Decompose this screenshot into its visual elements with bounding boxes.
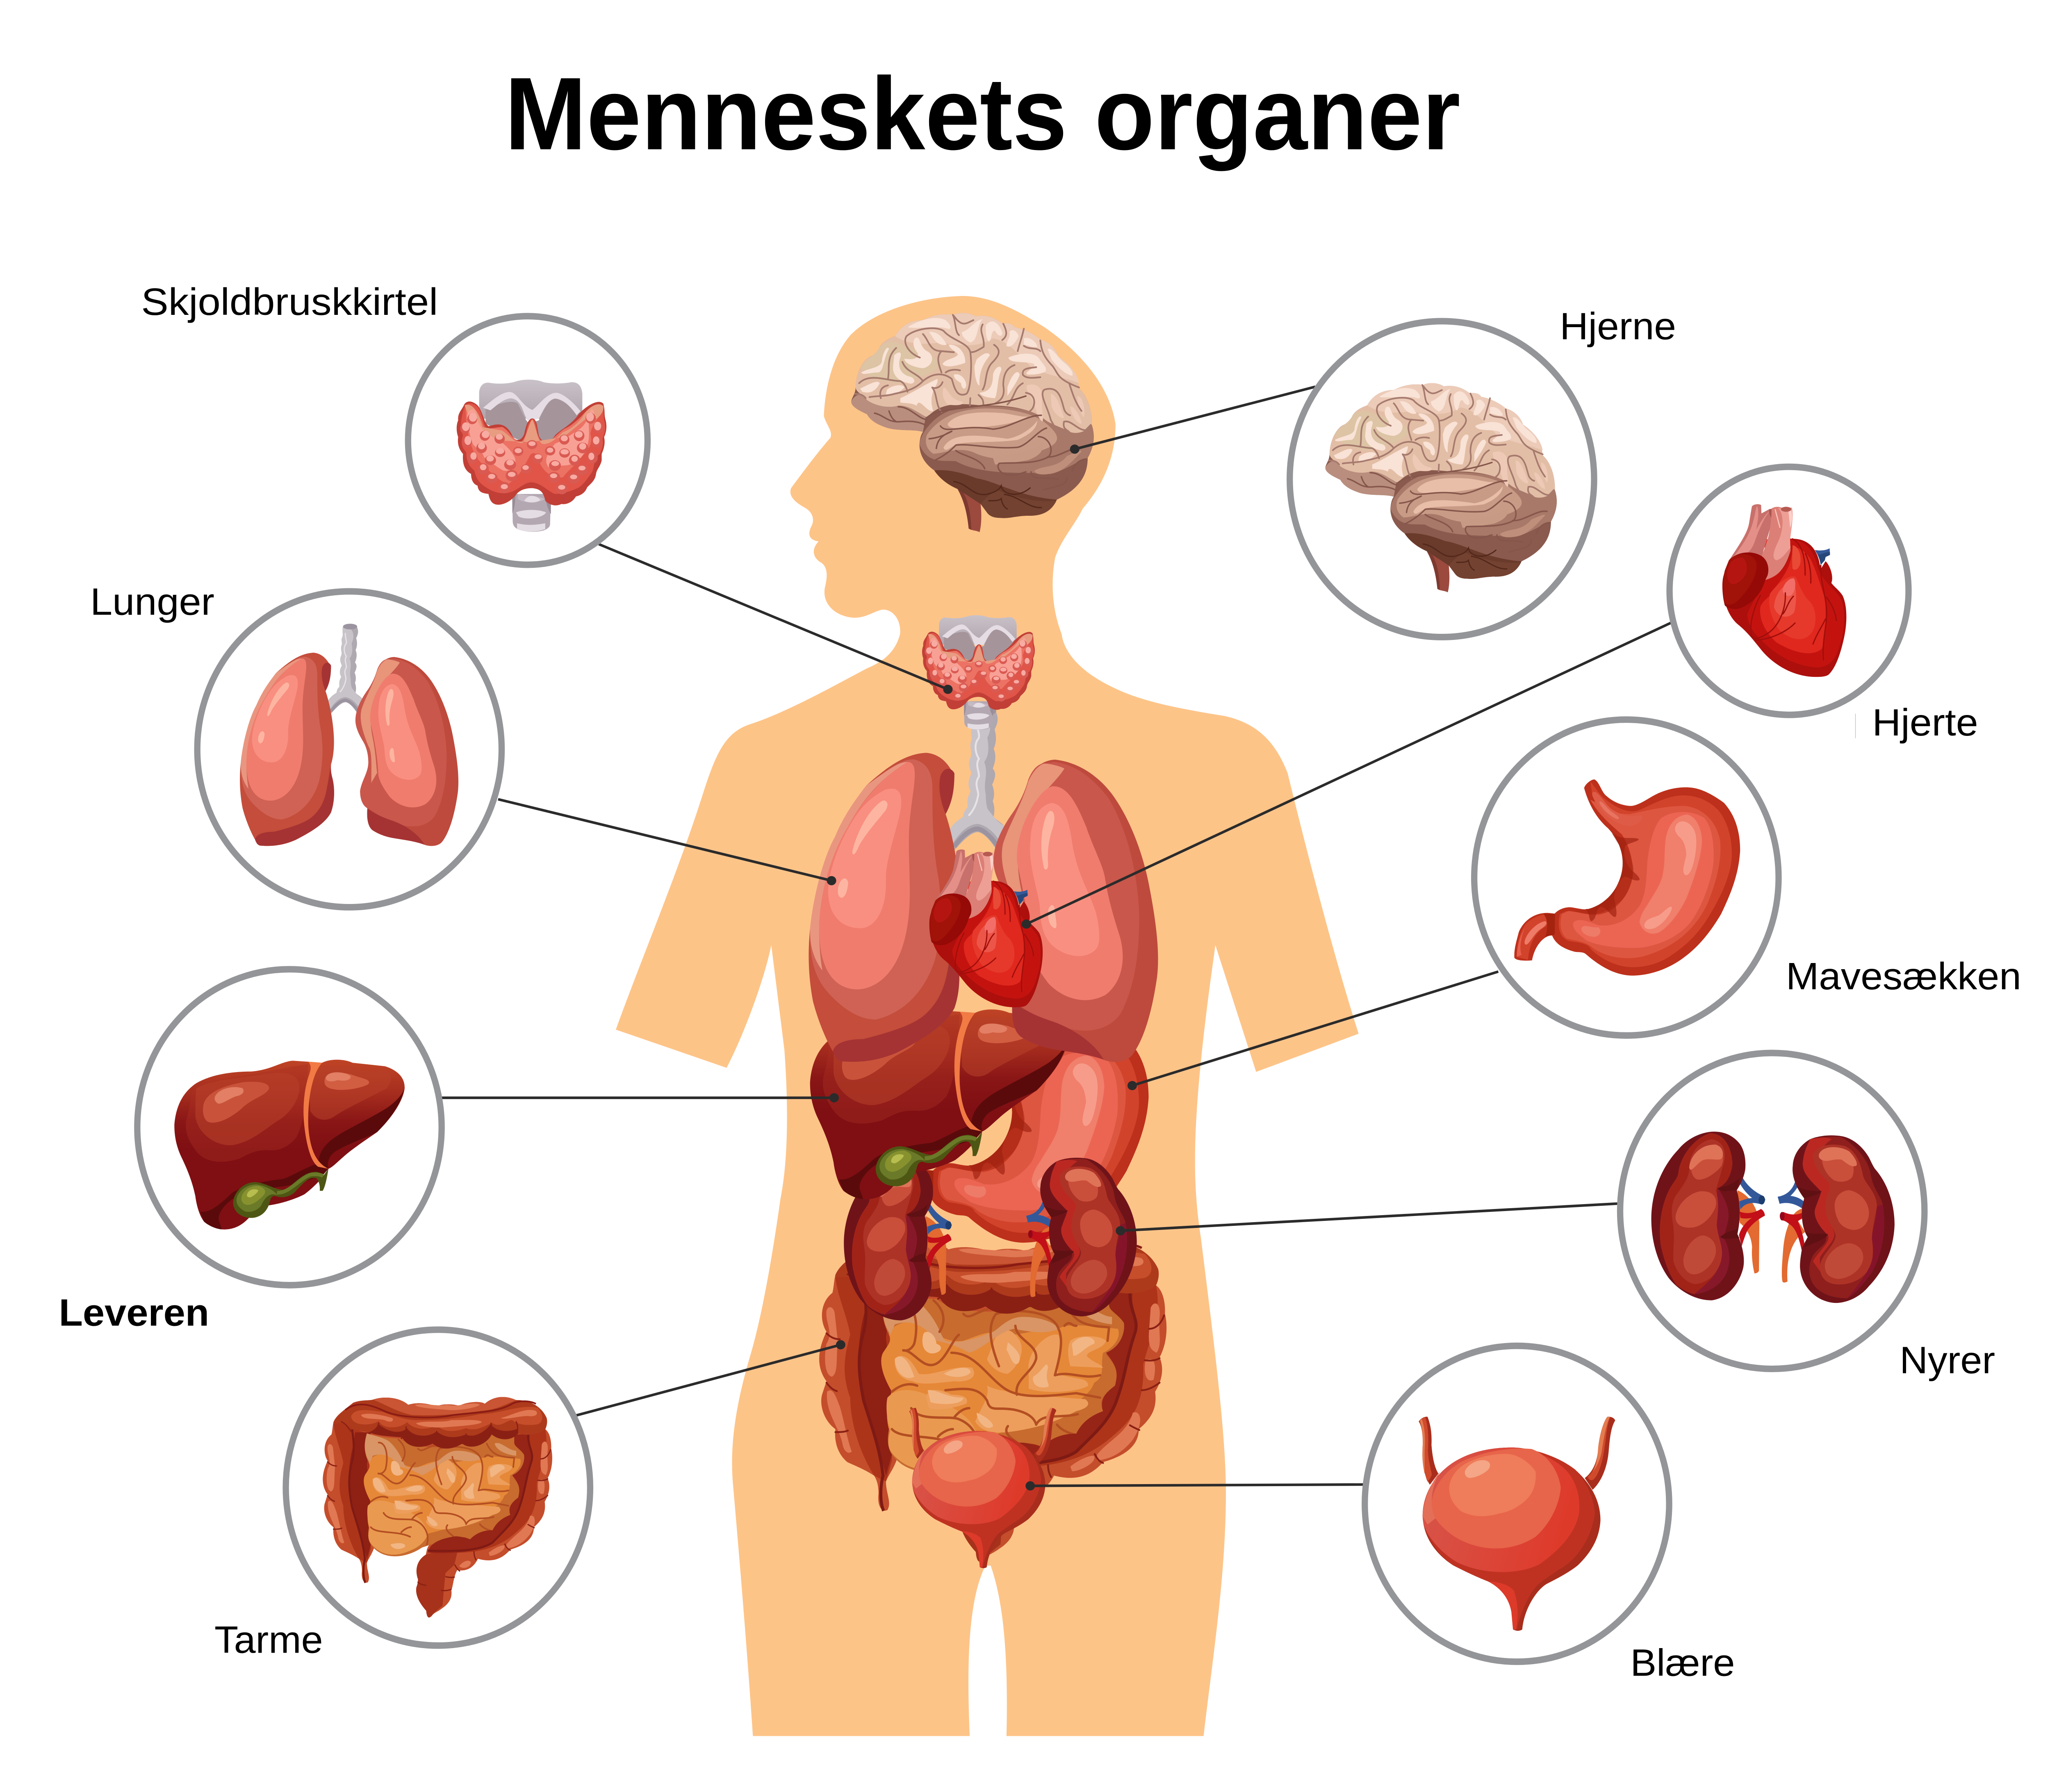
icon: bladder: [1419, 1417, 1615, 1631]
leader: brain: [1070, 387, 1315, 454]
organ: lungs and trachea: [809, 706, 1158, 1062]
label: Mavesækken: Mavesækken: [1786, 955, 2021, 997]
label: Blære: Blære: [1630, 1642, 1735, 1684]
label: Skjoldbruskkirtel: Skjoldbruskkirtel: [141, 281, 438, 323]
panel: Nyrer circle: [1620, 1053, 1925, 1369]
icon: lungs: [240, 624, 458, 846]
icon: liver: [174, 1060, 405, 1230]
leader: heart: [1022, 623, 1671, 929]
label: Lunger: Lunger: [90, 581, 214, 623]
panel: Mavesækken circle: [1474, 720, 1779, 1036]
panel: Blære circle: [1365, 1346, 1669, 1662]
leader: stomach: [1128, 972, 1498, 1090]
panel: Leveren circle: [137, 969, 442, 1285]
label: Hjerte: Hjerte: [1872, 701, 1978, 744]
body silhouette: [616, 296, 1359, 1736]
organ: intestines in abdomen: [819, 1238, 1166, 1562]
leader: intestines: [576, 1340, 845, 1415]
organ: liver with gallbladder: [810, 1009, 1068, 1199]
icon: thyroid: [457, 380, 606, 532]
leader: liver: [442, 1093, 839, 1102]
organ: brain in head: [851, 313, 1094, 532]
label: Tarme: Tarme: [214, 1619, 323, 1661]
panel: Hjerte circle: [1670, 467, 1909, 715]
icon: intestines: [323, 1397, 552, 1617]
leader: lungs: [498, 799, 836, 885]
organ: bladder in pelvis: [909, 1408, 1056, 1568]
panel: Tarme circle: [286, 1330, 590, 1646]
panel: Lunger circle: [197, 591, 502, 907]
icon: heart: [1722, 504, 1846, 677]
leader: bladder: [1025, 1481, 1364, 1491]
label: Leveren: Leveren: [59, 1292, 209, 1334]
icon: kidneys: [1651, 1132, 1895, 1303]
organ: thyroid at neck: [922, 615, 1035, 730]
icon: stomach: [1514, 779, 1740, 976]
leader lines with dots: [442, 387, 1671, 1491]
label: Nyrer: Nyrer: [1900, 1339, 1995, 1382]
panel: Skjoldbruskkirtel circle: [408, 316, 647, 565]
title: Menneskets organer: [505, 56, 1460, 171]
leader: kidneys: [1116, 1204, 1617, 1235]
icon: brain: [1326, 383, 1557, 592]
organ: stomach in abdomen: [886, 1015, 1148, 1243]
organ: left kidney in abdomen: [844, 1161, 952, 1321]
leader: thyroid: [599, 544, 952, 694]
organ: right kidney in abdomen: [1026, 1158, 1137, 1316]
label: Hjerne: Hjerne: [1560, 305, 1676, 348]
panel: Hjerne circle: [1290, 321, 1594, 637]
organ: heart on lungs: [929, 849, 1043, 1007]
organs inside body: [809, 313, 1166, 1568]
